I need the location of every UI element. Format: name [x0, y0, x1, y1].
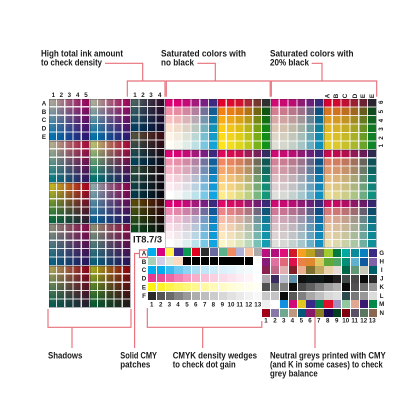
top callout text: high total ink: High total ink amount: [41, 48, 123, 58]
patch block: no black, no yellow 3: [165, 200, 218, 248]
patch block: shadows row 1 left: [49, 99, 90, 141]
column numbers: high ink 1 to 4: 2: [141, 92, 145, 99]
bracket: high total ink leader: [105, 63, 165, 97]
bottom callout text: neutral greys: (and K in some cases) to check: [270, 359, 383, 369]
patch block: 20% black, no yellow 2: [271, 150, 324, 200]
row letters: A to E at left: B: [42, 109, 47, 116]
column numbers: table G to N: 12: [360, 318, 368, 325]
rotated letters: top right: E: [369, 94, 376, 98]
panel: shadows patches: [49, 99, 131, 308]
row letters: G to N: L: [380, 293, 384, 300]
patch block: shadows row 2 left: [49, 141, 90, 183]
panel: saturated colours with no black: [165, 99, 271, 248]
row letters: A to F: D: [142, 276, 147, 282]
row letters: A to F: E: [142, 284, 146, 292]
patch block: no black, light yellow: [218, 200, 271, 248]
patch block: 20% black, no yellow 1: [271, 99, 324, 150]
column numbers: table G to N: 6: [308, 318, 312, 325]
rotated letters: top right: A: [324, 93, 332, 98]
column numbers: table A to F: 5: [185, 302, 189, 308]
bottom callout text: shadows: Shadows: [48, 350, 82, 360]
rotated numbers: right side: 2: [378, 136, 385, 140]
column numbers: table G to N: 3: [282, 318, 286, 325]
rotated letters: top right: D: [352, 93, 359, 98]
patch block: no black, no yellow 2: [165, 150, 218, 200]
column numbers: table G to N: 9: [335, 318, 339, 325]
rotated numbers: right side: 1: [378, 143, 385, 147]
row letters: A to F: A: [142, 250, 147, 258]
label: IT8.7/3: IT8.7/3: [133, 235, 162, 246]
patch block: shadows row 5 right: [90, 266, 131, 308]
patch block: no black, full yellow: [218, 99, 271, 150]
bottom callout text: neutral greys: [270, 350, 386, 378]
column numbers: shadows 1 to 5: 4: [76, 92, 80, 99]
table: solid CMY patches and CMYK density wedges A to F: [148, 248, 262, 300]
column numbers: table A to F: 12: [245, 302, 253, 308]
column numbers: table A to F: 3: [168, 302, 172, 308]
patch block: shadows row 3 left: [49, 183, 90, 224]
column numbers: table A to F: 13: [254, 302, 262, 308]
column numbers: table A to F: 4: [176, 302, 180, 308]
row letters: G to N: [379, 250, 384, 317]
row letters: G to N: J: [380, 276, 384, 282]
rotated numbers: right side: 6: [378, 100, 385, 104]
column numbers: table A to F: 2: [159, 302, 163, 308]
patch block: high ink 1: [131, 99, 165, 132]
top callout text: high total ink: [41, 48, 123, 68]
bottom callout text: neutral greys: Neutral greys printed with CMY: [270, 350, 386, 360]
column numbers: table A to F: 1: [150, 302, 154, 308]
top callout text: saturated no black: [161, 48, 246, 68]
row letters: A to E at left: [42, 100, 47, 141]
patch block: 20% black, full yellow: [324, 99, 377, 150]
column numbers: table G to N: 7: [317, 318, 321, 325]
column numbers: table A to F: 8: [212, 302, 216, 308]
column numbers: table G to N: 2: [273, 318, 277, 325]
column numbers: shadows 1 to 5: 3: [68, 92, 72, 99]
column numbers: table G to N: 10: [342, 318, 350, 325]
column numbers: shadows 1 to 5: 1: [52, 92, 56, 99]
row letters: G to N: N: [379, 310, 384, 317]
rotated letters: top right: B: [333, 93, 340, 98]
column numbers: table A to F: 10: [228, 302, 235, 308]
bracket: shadows leader: [48, 309, 131, 348]
row letters: A to E at left: E: [42, 134, 46, 141]
column numbers: table G to N: 11: [351, 318, 359, 325]
row letters: G to N: M: [379, 301, 384, 308]
top callout text: saturated 20% black: 20% black: [270, 58, 309, 68]
column numbers: table G to N: 8: [326, 318, 330, 325]
column numbers: high ink 1 to 4: 4: [158, 92, 162, 99]
patch block: shadows row 1 right: [90, 99, 131, 141]
column numbers: shadows 1 to 5: [52, 92, 88, 99]
column numbers: table A to F: 11: [236, 302, 244, 308]
bottom callout text: neutral greys: grey balance: [270, 368, 318, 378]
leader: solid CMY patches: [135, 250, 148, 348]
top callout text: saturated 20% black: [270, 48, 354, 68]
column numbers: table A to F: 7: [203, 302, 207, 308]
panel: high total ink patches: [131, 99, 165, 233]
column numbers: table G to N: 4: [291, 318, 295, 325]
row letters: G to N: K: [379, 284, 384, 291]
top callout text: saturated 20% black: Saturated colors with: [270, 48, 354, 58]
leader: neutral greys: [314, 317, 316, 348]
column numbers: table G to N: 13: [369, 318, 376, 325]
patch block: shadows row 5 left: [49, 266, 90, 308]
patch block: high ink 4: [131, 199, 165, 233]
column numbers: table G to N: 5: [300, 318, 304, 325]
rotated numbers: right side: 3: [378, 127, 385, 131]
top callout text: high total ink: to check density: [41, 58, 102, 68]
row letters: A to F: C: [142, 267, 147, 274]
row letters: A to F: [142, 250, 147, 300]
row letters: G to N: H: [379, 258, 384, 266]
patch block: high ink 3: [131, 166, 165, 199]
rotated letters: top right: E: [360, 94, 367, 98]
bottom callout text: solid CMY patches: [120, 350, 157, 369]
column numbers: high ink 1 to 4: [133, 92, 162, 99]
column numbers: table G to N: [264, 318, 376, 325]
patch block: 20% black, no yellow 3: [271, 200, 324, 248]
rotated numbers: right side: [378, 100, 385, 147]
rotated letters: top right: [324, 93, 376, 98]
rotated letters: top right: C: [342, 93, 349, 98]
rotated numbers: right side: 5: [378, 109, 385, 113]
bottom callout text: solid CMY patches: patches: [120, 359, 150, 369]
row letters: A to F: F: [142, 293, 146, 300]
column numbers: table G to N: 1: [264, 318, 268, 325]
patch block: shadows row 4 right: [90, 224, 131, 266]
top callout text: saturated no black: Saturated colors with: [161, 48, 246, 58]
row letters: A to E at left: D: [42, 126, 47, 132]
column numbers: shadows 1 to 5: 2: [60, 92, 64, 99]
row letters: A to F: B: [142, 259, 147, 266]
bracket: no black leader: [166, 63, 270, 97]
column numbers: table A to F: 6: [194, 302, 198, 308]
bracket: density wedges leader: [147, 308, 262, 348]
patch block: shadows row 4 left: [49, 224, 90, 266]
row letters: G to N: I: [381, 267, 383, 274]
patch block: shadows row 3 right: [90, 183, 131, 224]
patch block: 20% black, light yellow: [324, 200, 377, 248]
column numbers: table A to F: 9: [221, 302, 225, 308]
patch block: 20% black, mid yellow: [324, 150, 377, 200]
column numbers: high ink 1 to 4: 1: [133, 92, 137, 99]
patch block: high ink 2: [131, 132, 165, 166]
bottom callout text: solid CMY patches: Solid CMY: [120, 350, 157, 360]
column numbers: high ink 1 to 4: 3: [149, 92, 153, 99]
rotated numbers: right side: 4: [378, 118, 385, 122]
patch block: no black, no yellow 1: [165, 99, 218, 150]
bottom callout text: density wedges: to check dot gain: [173, 359, 236, 369]
bottom callout text: density wedges: [173, 350, 257, 369]
row letters: G to N: G: [379, 250, 384, 257]
column numbers: shadows 1 to 5: 5: [84, 92, 88, 99]
bracket: 20% black leader: [271, 63, 377, 97]
bottom callout text: density wedges: CMYK density wedges: [173, 350, 257, 360]
panel: saturated colours with 20% black: [271, 99, 377, 248]
table: neutral greys and mixed colours G to N: [262, 249, 377, 317]
row letters: A to E at left: A: [42, 100, 47, 108]
patch block: shadows row 2 right: [90, 141, 131, 183]
patch block: no black, mid yellow: [218, 150, 271, 200]
row letters: A to E at left: C: [42, 117, 47, 124]
top callout text: saturated no black: no black: [161, 58, 194, 68]
column numbers: table A to F: [150, 302, 262, 308]
